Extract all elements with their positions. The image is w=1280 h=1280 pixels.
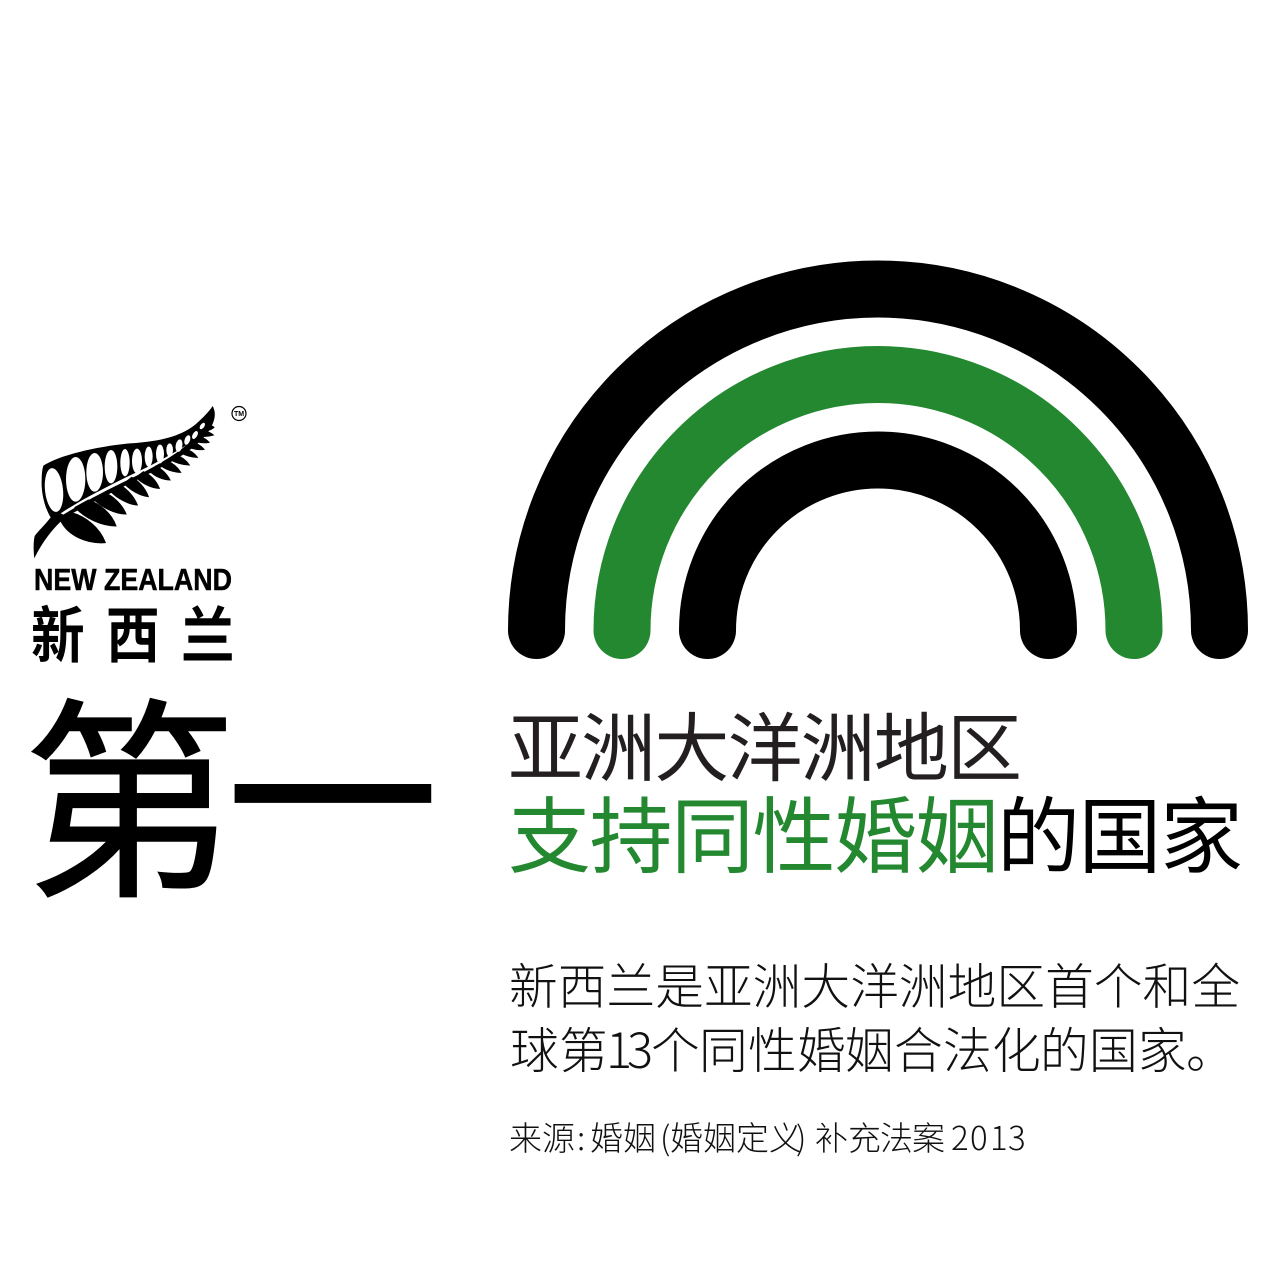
icon: trademark symbol: TM bbox=[234, 411, 244, 418]
heading line 1: 亚洲大洋洲地区 bbox=[508, 688, 1022, 797]
big heading: first: 一 bbox=[226, 630, 439, 938]
outer black arc bbox=[536, 289, 1220, 630]
logo text: Chinese name: 兰 bbox=[181, 586, 235, 675]
icon: silver fern bbox=[34, 406, 215, 558]
big heading: first bbox=[22, 630, 439, 942]
logo text: NEW ZEALAND: NEW ZEALAND bbox=[34, 562, 232, 597]
source note: 来源:婚姻(婚姻定义)补充法案 2013 bbox=[509, 1112, 1026, 1160]
logo text: Chinese name: 西 bbox=[106, 586, 160, 675]
body text bbox=[509, 949, 1240, 1083]
logo text: Chinese name: 新 bbox=[31, 586, 85, 675]
body line 1: 新西兰是亚洲大洋洲地区首个和全 bbox=[509, 949, 1240, 1019]
rainbow arcs chart bbox=[536, 289, 1220, 630]
logo text: Chinese name bbox=[31, 586, 235, 675]
middle green arc bbox=[622, 374, 1134, 630]
inner black arc bbox=[708, 460, 1048, 630]
body line 2: 球第13个同性婚姻合法化的国家。 bbox=[510, 1013, 1235, 1083]
heading line 2: 支持同性婚姻的国家 bbox=[508, 770, 1243, 890]
logo: New Zealand fern mark bbox=[31, 406, 246, 675]
icon: trademark symbol bbox=[232, 406, 246, 420]
big heading: first: 第 bbox=[22, 632, 236, 942]
